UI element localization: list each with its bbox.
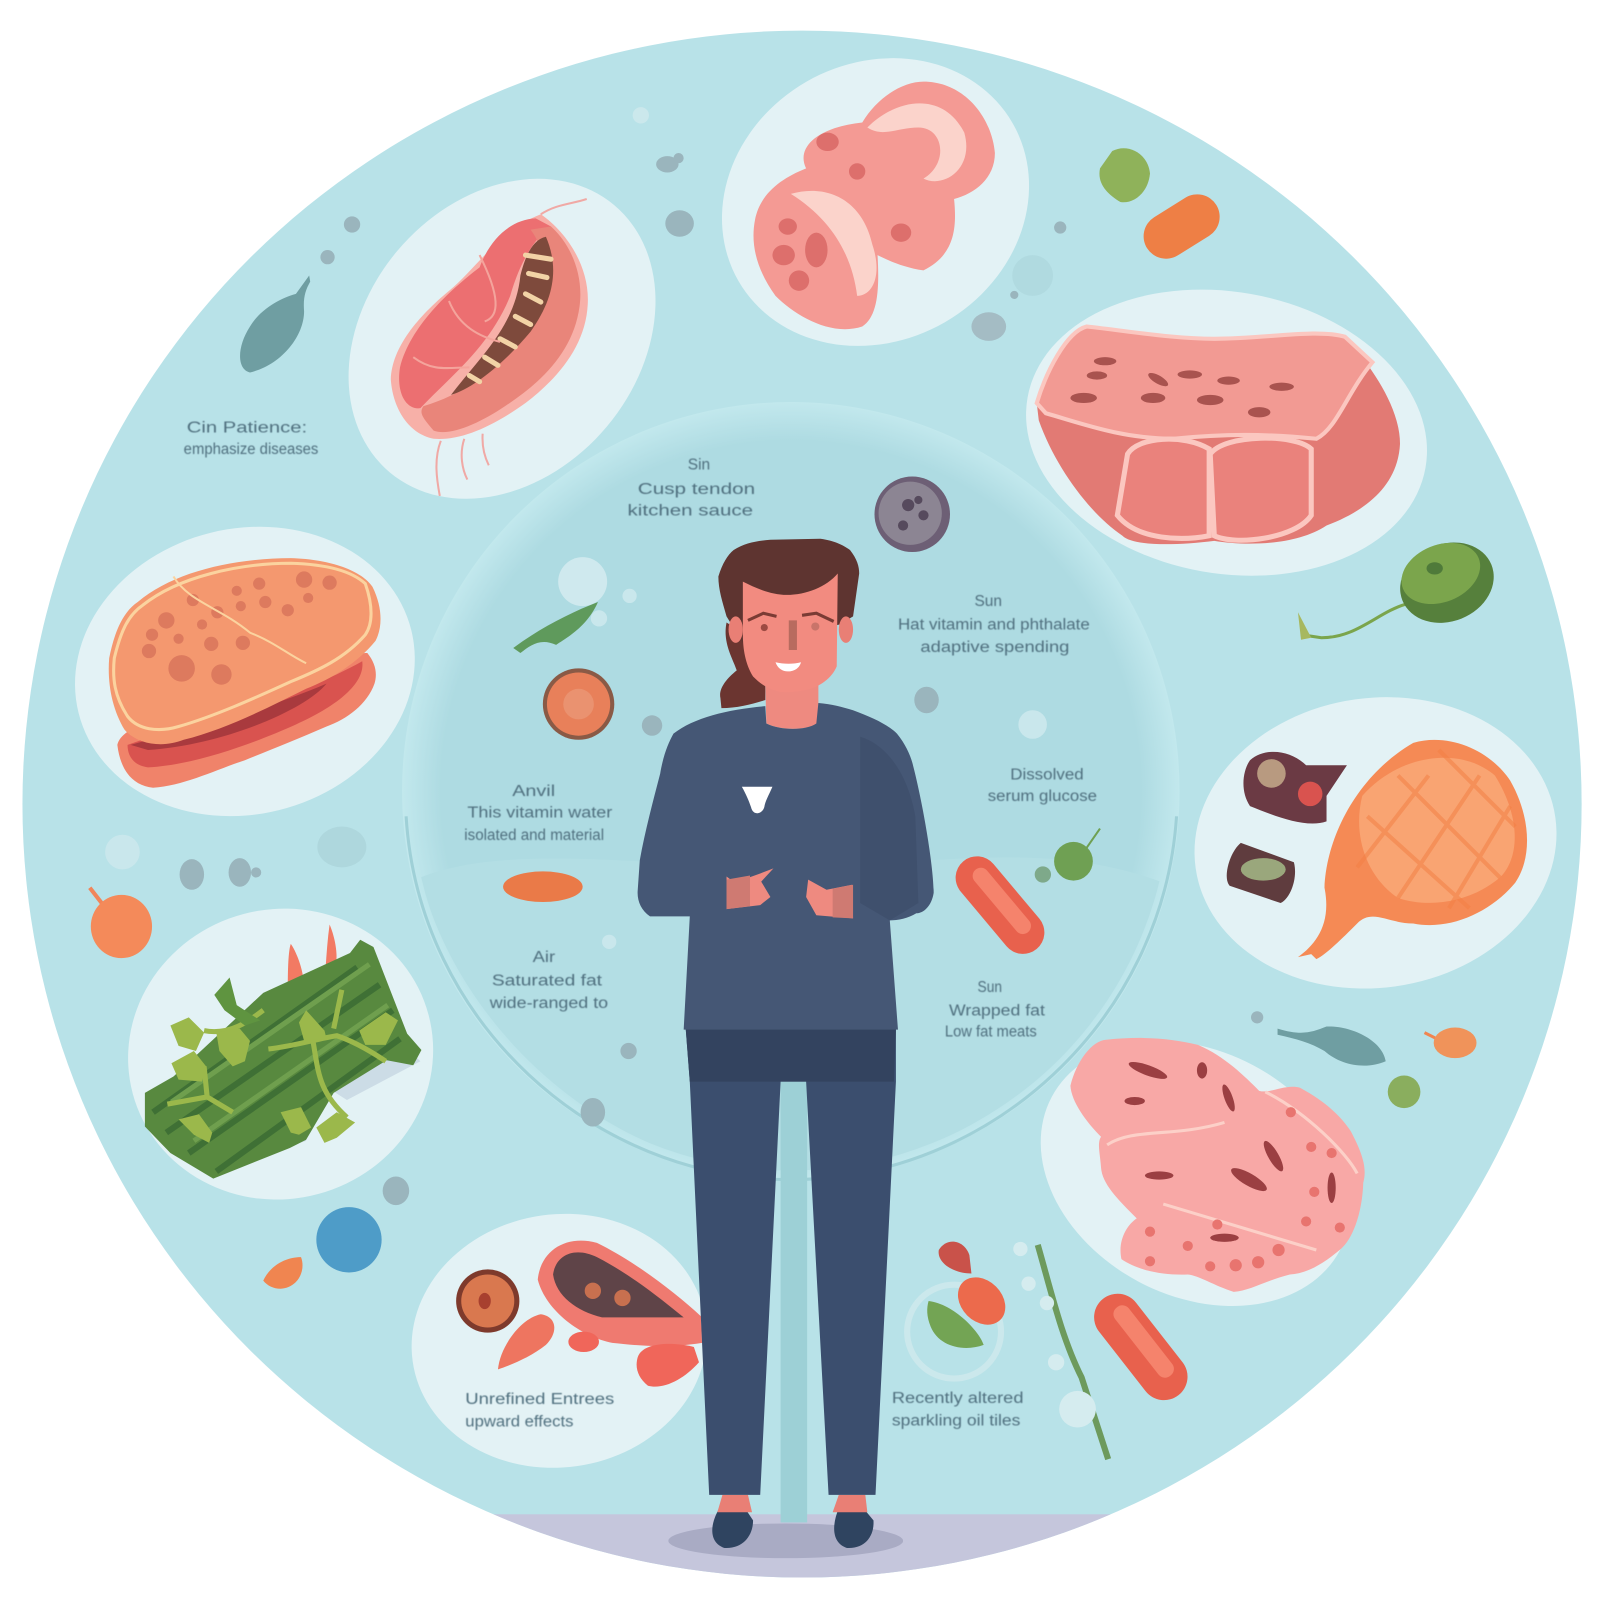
label: bottom centre: Recently altered xyxy=(892,1390,1023,1407)
icon: leaf sprig xyxy=(513,602,598,653)
icon: small orange xyxy=(1424,1028,1477,1058)
icon: blue ball xyxy=(316,1207,382,1272)
pale ring xyxy=(907,1285,1001,1379)
label: upper left xyxy=(184,420,319,458)
label: right lower: Low fat meats xyxy=(945,1024,1037,1041)
icon: green leaf xyxy=(1099,148,1150,202)
shoes xyxy=(712,1508,874,1548)
icon: green stalk xyxy=(1038,1245,1108,1459)
label: right upper xyxy=(898,593,1090,656)
panel: pink organ meat xyxy=(669,3,1082,401)
ponytail xyxy=(720,622,765,708)
panel: sandwich meat xyxy=(44,491,446,852)
panel: bowl and carrot bites xyxy=(395,1195,723,1487)
person xyxy=(638,539,934,1558)
label: bottom centre: sparkling oil tiles xyxy=(892,1413,1021,1430)
icon: orange round slice xyxy=(543,668,614,740)
panel: orange fish and dark bites xyxy=(1175,674,1576,1012)
neck xyxy=(765,684,818,729)
small pale dots xyxy=(105,589,1047,949)
label: top centre xyxy=(628,456,755,519)
torso and arms xyxy=(638,703,934,1030)
gap between legs xyxy=(781,1082,807,1522)
icon: teal leaf xyxy=(240,276,310,372)
pale bubble xyxy=(558,557,607,606)
label: left lower xyxy=(489,949,608,1012)
label: right middle: Dissolved xyxy=(1010,767,1084,784)
label: upper left: emphasize diseases xyxy=(184,441,319,458)
label: right lower: Wrapped fat xyxy=(949,1002,1046,1019)
hand shading xyxy=(727,876,853,918)
label: left middle: isolated and material xyxy=(464,827,604,844)
inner circle panel xyxy=(402,402,1180,1180)
label: bowl: upward effects xyxy=(465,1414,574,1431)
label: left middle xyxy=(464,783,612,844)
label: left lower: wide-ranged to xyxy=(489,995,608,1012)
label: bowl xyxy=(465,1391,615,1431)
icon: purple round xyxy=(874,477,950,552)
label: left middle: Anvil xyxy=(512,783,555,800)
icon: red berry xyxy=(939,1242,971,1273)
panel: heart meat xyxy=(285,117,719,560)
haze spot xyxy=(317,827,366,867)
label: right middle xyxy=(988,767,1097,805)
label: top centre: kitchen sauce xyxy=(628,502,753,519)
icon: green leaf lower xyxy=(927,1301,984,1348)
right hand xyxy=(806,880,853,918)
floor xyxy=(494,1514,1110,1578)
label: left lower: Saturated fat xyxy=(492,973,603,990)
label: right upper: adaptive spending xyxy=(920,639,1069,656)
icon: orange chunk xyxy=(948,1268,1015,1334)
label: left lower: Air xyxy=(533,949,555,966)
icon: red sausage xyxy=(947,848,1053,963)
panel: pork chop xyxy=(1003,259,1450,606)
label: left middle: This vitamin water xyxy=(467,804,612,821)
hair xyxy=(718,539,859,643)
icon: almond xyxy=(503,871,583,902)
pale bubbles by stalk xyxy=(1013,1242,1096,1428)
icon: green pea xyxy=(1388,1076,1420,1108)
scattered ingredients xyxy=(90,107,1506,1459)
label: upper left: Cin Patience: xyxy=(187,420,307,437)
arm shading xyxy=(860,737,918,920)
ears xyxy=(729,616,853,643)
grey dots upper left xyxy=(320,153,1066,341)
label: right lower xyxy=(945,979,1046,1041)
eyebrows and eyes xyxy=(748,613,834,631)
pale dot top xyxy=(633,107,649,123)
icon: carrot xyxy=(1135,186,1228,267)
label: right upper: Sun xyxy=(974,593,1002,610)
text labels xyxy=(184,420,1097,1431)
grey dots centre xyxy=(180,687,1263,1205)
label: bottom centre xyxy=(892,1390,1023,1430)
icon: orange wedge xyxy=(263,1257,303,1289)
shadow xyxy=(668,1523,903,1558)
label: right upper: Hat vitamin and phthalate xyxy=(898,617,1090,634)
panel: pink sliced meat xyxy=(994,989,1398,1358)
label: bowl: Unrefined Entrees xyxy=(465,1391,615,1408)
icon: orange fruit xyxy=(90,888,152,958)
nose xyxy=(789,620,797,650)
icon: green ball and stem xyxy=(1035,829,1100,883)
label: right lower: Sun xyxy=(978,979,1002,996)
icon: teal leaf lower right xyxy=(1278,1026,1386,1066)
icon: red sausage lower xyxy=(1085,1284,1197,1410)
waist shade xyxy=(686,1029,896,1082)
collar mark xyxy=(742,787,772,813)
face xyxy=(743,573,838,692)
left hand xyxy=(727,868,773,909)
smile xyxy=(776,662,801,671)
label: right middle: serum glucose xyxy=(988,788,1097,805)
icon: green fruit xyxy=(1298,529,1506,640)
label: top centre: Cusp tendon xyxy=(638,481,755,498)
ankles xyxy=(717,1495,867,1512)
pale haze xyxy=(1012,255,1053,296)
panel: green vegetable log xyxy=(95,875,466,1234)
trousers xyxy=(686,1029,896,1495)
label: top centre: Sin xyxy=(688,456,710,473)
